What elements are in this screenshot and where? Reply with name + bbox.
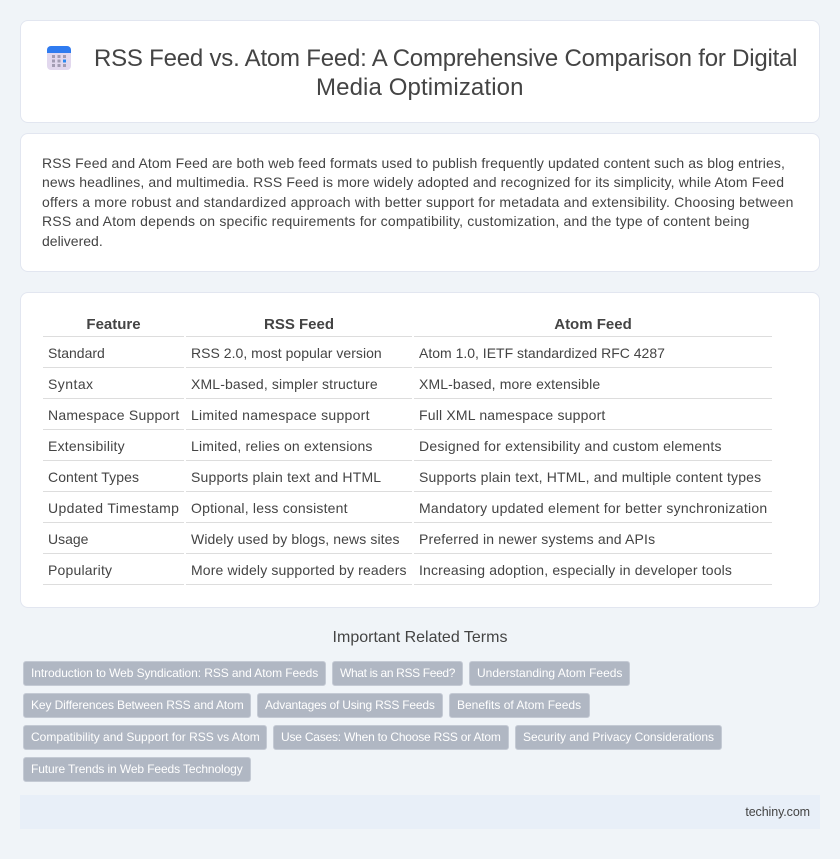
tags: related terms — [23, 661, 722, 782]
intro text: offers a more robust and standardized approach with better support for metadata and extensibility. Choosing between — [42, 194, 794, 210]
panel: comparison table: Limited namespace support — [191, 407, 370, 423]
panel: comparison table: Supports plain text and HTML — [191, 469, 381, 485]
icon: calendar — [47, 46, 71, 70]
panel: comparison table: Optional, less consistent — [191, 500, 348, 516]
tag — [469, 661, 630, 686]
heading: Important Related Terms: Important Related Terms — [333, 629, 507, 646]
panel: comparison table: Limited, relies on extensions — [191, 438, 373, 454]
tag: Compatibility and Support for RSS vs Atom — [31, 730, 260, 744]
panel: comparison table: XML-based, simpler structure — [191, 376, 378, 392]
tag — [23, 725, 267, 750]
intro text: RSS Feed and Atom Feed are both web feed formats used to publish frequently updated content such as blog entries, — [42, 155, 785, 171]
panel: comparison table: Widely used by blogs, news sites — [191, 531, 400, 547]
tag: Introduction to Web Syndication: RSS and Atom Feeds — [31, 666, 318, 680]
tag — [257, 693, 443, 718]
tag — [332, 661, 463, 686]
table header: Feature: Feature — [86, 316, 141, 333]
tag: Key Differences Between RSS and Atom — [31, 698, 244, 712]
footer credit: techiny.com — [745, 805, 810, 819]
row: Usage: Usage — [48, 531, 88, 547]
title: Media Optimization — [316, 74, 524, 101]
row: Namespace Support: Namespace Support — [48, 407, 180, 423]
tag: Benefits of Atom Feeds — [457, 698, 581, 712]
tag: Understanding Atom Feeds — [477, 666, 622, 680]
tag: Use Cases: When to Choose RSS or Atom — [281, 730, 501, 744]
title — [94, 45, 797, 101]
row: Content Types: Content Types — [48, 469, 139, 485]
panel: comparison table: Full XML namespace support — [419, 407, 606, 423]
panel: comparison table: Atom 1.0, IETF standardized RFC 4287 — [419, 345, 665, 361]
panel: comparison table: RSS 2.0, most popular version — [191, 345, 382, 361]
tag — [23, 757, 251, 782]
row: Standard: Standard — [48, 345, 105, 361]
tag: Security and Privacy Considerations — [523, 730, 714, 744]
tag — [23, 693, 251, 718]
table header: RSS Feed: RSS Feed — [264, 316, 334, 333]
row: Popularity: Popularity — [48, 562, 112, 578]
header panel — [20, 20, 820, 123]
tag — [23, 661, 326, 686]
panel: comparison table: More widely supported by readers — [191, 562, 407, 578]
panel: introduction — [20, 133, 820, 272]
footer bar — [20, 795, 820, 829]
intro text: delivered. — [42, 233, 103, 249]
intro text — [42, 155, 794, 249]
panel: comparison table: XML-based, more extensible — [419, 376, 600, 392]
panel: comparison table: Increasing adoption, especially in developer tools — [419, 562, 732, 578]
intro text: RSS and Atom depends on specific requirements for compatibility, customization, and the type of content being — [42, 213, 750, 229]
panel: comparison table — [20, 292, 820, 608]
table header: Atom Feed: Atom Feed — [554, 316, 632, 333]
tag — [273, 725, 509, 750]
panel: comparison table: Mandatory updated element for better synchronization — [419, 500, 767, 516]
title: RSS Feed vs. Atom Feed: A Comprehensive Comparison for Digital — [94, 45, 797, 72]
panel: comparison table: Preferred in newer systems and APIs — [419, 531, 655, 547]
row: Extensibility: Extensibility — [48, 438, 125, 454]
tag — [515, 725, 722, 750]
tag — [449, 693, 590, 718]
row: Updated Timestamp: Updated Timestamp — [48, 500, 179, 516]
tag: Future Trends in Web Feeds Technology — [31, 762, 243, 776]
panel: comparison table: Supports plain text, HTML, and multiple content types — [419, 469, 761, 485]
row: Syntax: Syntax — [48, 376, 94, 392]
tag: What is an RSS Feed? — [340, 666, 455, 680]
panel: comparison table: Designed for extensibility and custom elements — [419, 438, 722, 454]
intro text: news headlines, and multimedia. RSS Feed is more widely adopted and recognized for its simplicity, while Atom Feed — [42, 174, 784, 190]
tag: Advantages of Using RSS Feeds — [265, 698, 435, 712]
